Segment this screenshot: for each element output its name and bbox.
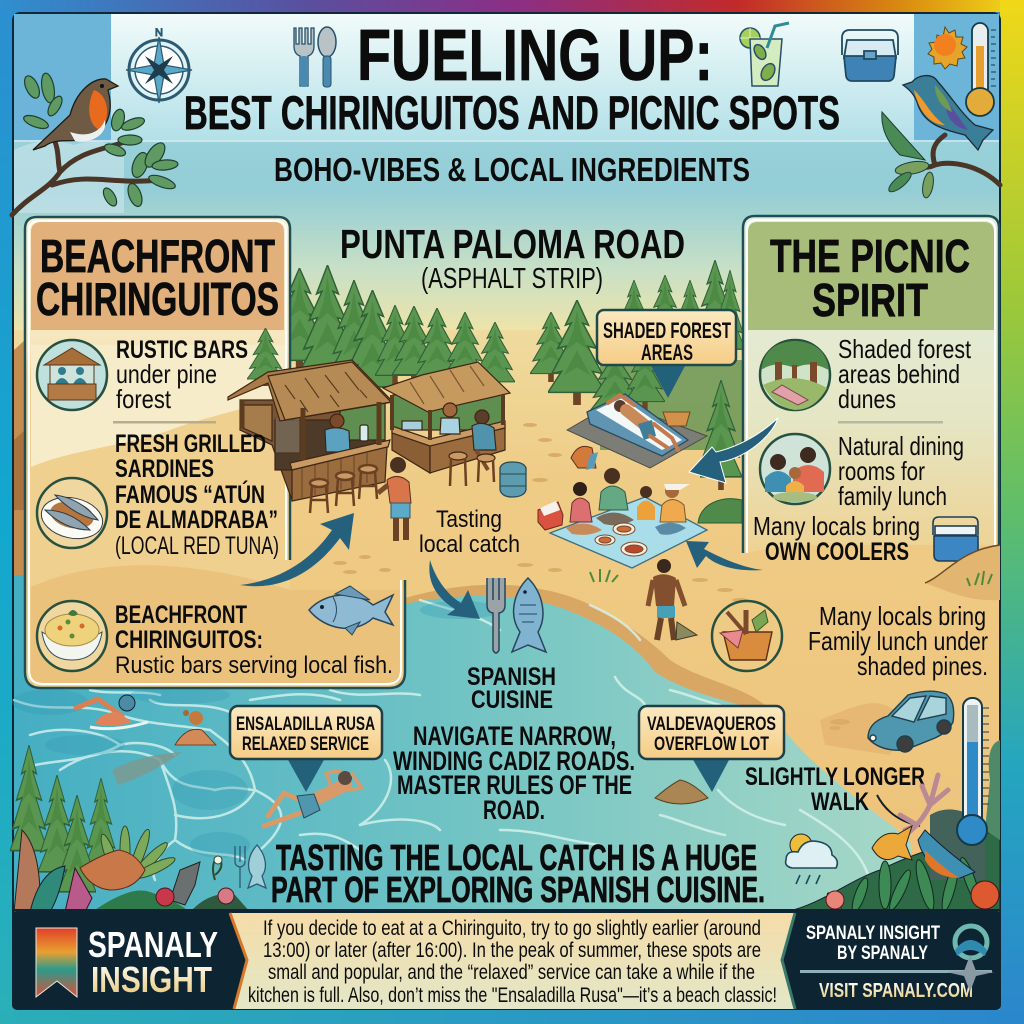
text: grilled sardines and tuna — [115, 430, 279, 560]
small pine in panel — [247, 328, 284, 386]
footprints in the sand — [333, 423, 850, 730]
text: shaded forest areas — [838, 334, 972, 414]
child — [637, 486, 655, 520]
subtitle: BOHO-VIBES & LOCAL INGREDIENTS — [274, 151, 750, 188]
icon: small fork and fish — [235, 845, 266, 888]
panel heading — [31, 222, 284, 330]
text: navigate roads: WINDING CADIZ ROADS. — [393, 746, 635, 776]
icon: lower thermometer — [957, 698, 989, 845]
callout: valdevaqueros overflow lot — [639, 706, 784, 792]
illustration: family picnic blanket — [538, 468, 707, 568]
text: slightly longer walk: WALK — [811, 788, 869, 816]
arrow: to spanish cuisine — [429, 560, 480, 619]
icon: rustic bar — [37, 340, 107, 410]
footer logo: spanaly insight: INSIGHT — [91, 959, 212, 1000]
text: beachfront chiringuitos note: Rustic bars serving local fish. — [115, 652, 393, 679]
icon: family lunch — [760, 434, 830, 504]
footer tip scroll — [230, 913, 795, 1009]
callout: shaded forest areas: AREAS — [641, 340, 693, 365]
credit logo — [946, 926, 994, 992]
text: tasting local catch: local catch — [419, 531, 520, 558]
text: navigate roads — [393, 721, 635, 825]
icon: sun — [928, 27, 967, 69]
text: beachfront chiringuitos note: CHIRINGUITOS: — [115, 626, 263, 654]
footer credit: VISIT SPANALY.COM — [819, 980, 973, 1002]
illustration: bar stools — [310, 465, 377, 513]
arrow: to picnic from beach — [686, 541, 763, 570]
footer tip scroll: 13:00) or later (after 16:00). In the peak of summer, these spots are — [263, 939, 761, 962]
text: own coolers: Many locals bring — [753, 511, 920, 541]
text: natural dining rooms: rooms for — [838, 456, 925, 486]
illustration: walking man — [648, 559, 697, 640]
closing statement — [271, 837, 765, 910]
callout: ensaladilla rusa: RELAXED SERVICE — [242, 734, 369, 755]
foliage: bottom right with fish and bird — [785, 740, 1000, 919]
road heading — [340, 221, 685, 295]
icon: fork and fish — [487, 578, 546, 653]
panel heading: SPIRIT — [812, 274, 928, 326]
icon: compass — [126, 27, 192, 103]
icon: picnic basket — [712, 601, 782, 671]
callout: ensaladilla rusa: ENSALADILLA RUSA — [236, 714, 375, 735]
illustration: swimmer two — [112, 710, 216, 785]
text: natural dining rooms — [838, 431, 964, 511]
text: family lunch note: shaded pines. — [857, 651, 988, 681]
icon: temperature gauge top — [966, 23, 996, 116]
text: grilled sardines and tuna: FAMOUS “ATÚN — [115, 479, 265, 509]
icon: blue cooler — [842, 30, 898, 81]
text: family lunch note: Family lunch under — [808, 626, 988, 656]
footer tip scroll: If you decide to eat at a Chiringuito, try to go slightly earlier (around — [263, 917, 761, 940]
footer logo: spanaly insight — [36, 924, 218, 1000]
closing statement: TASTING THE LOCAL CATCH IS A HUGE — [276, 837, 757, 878]
text: navigate roads: ROAD. — [483, 795, 545, 825]
illustration: blue car — [868, 691, 954, 752]
illustration: beach bar one — [228, 360, 393, 501]
footer tip scroll: small and popular, and the “relaxed” service can take a while if the — [268, 961, 755, 984]
text: beachfront chiringuitos note: BEACHFRONT — [115, 601, 247, 629]
title — [184, 16, 840, 139]
text: shaded forest areas: areas behind — [838, 359, 960, 389]
callout: shaded forest areas — [597, 310, 736, 398]
panel heading: BEACHFRONT — [40, 230, 275, 282]
text: own coolers: OWN COOLERS — [765, 538, 909, 566]
text: grilled sardines and tuna: FRESH GRILLED — [115, 430, 266, 458]
text: grilled sardines and tuna: SARDINES — [115, 455, 214, 483]
darker water patches — [12, 601, 500, 858]
man — [596, 468, 634, 525]
illustration: rock — [655, 780, 708, 804]
text: slightly longer walk — [745, 763, 925, 816]
footer bar — [12, 909, 1001, 1010]
illustration: barrel — [500, 462, 526, 497]
text: grilled sardines and tuna: DE ALMADRABA” — [115, 506, 278, 534]
icon: sun and rain cloud — [786, 834, 837, 884]
elder — [655, 484, 690, 535]
red cooler — [538, 501, 563, 530]
closing statement: PART OF EXPLORING SPANISH CUISINE. — [271, 869, 765, 910]
text: slightly longer walk: SLIGHTLY LONGER — [745, 763, 925, 791]
illustration: person on lounger — [567, 394, 707, 468]
footer logo: spanaly insight: SPANALY — [88, 924, 218, 965]
icon: mojito glass — [740, 23, 789, 86]
callout: shaded forest areas: SHADED FOREST — [603, 318, 731, 343]
text: navigate roads: NAVIGATE NARROW, — [413, 721, 616, 751]
text: family lunch note — [808, 601, 988, 681]
water ripples — [14, 600, 868, 880]
callout: valdevaqueros overflow lot: OVERFLOW LOT — [654, 734, 769, 755]
footer tip scroll: kitchen is full. Also, don’t miss the "Ensaladilla Rusa"—it’s a beach classic! — [248, 984, 777, 1007]
dune on right — [925, 545, 1000, 600]
footer credit: BY SPANALY — [837, 943, 928, 964]
icon: grilled sardines — [37, 478, 107, 548]
foliage: bottom left — [10, 745, 250, 912]
text: spanish cuisine: SPANISH — [467, 663, 556, 691]
footer credit — [800, 923, 994, 1002]
header band — [14, 14, 999, 142]
text: spanish cuisine — [467, 663, 556, 714]
text: rustic bars: under pine — [116, 359, 217, 389]
text: tasting local catch: Tasting — [436, 506, 502, 533]
forest: left pines — [272, 265, 515, 400]
text: family lunch note: Many locals bring — [819, 601, 986, 631]
text: natural dining rooms: family lunch — [838, 481, 947, 511]
icon: shaded forest — [760, 340, 830, 410]
text: own coolers — [753, 511, 920, 566]
text: rustic bars: forest — [116, 384, 172, 414]
footer credit: SPANALY INSIGHT — [806, 923, 940, 944]
panel heading: CHIRINGUITOS — [36, 273, 279, 325]
icon: blue fish — [309, 586, 393, 635]
icon: cooler — [933, 517, 978, 561]
panel heading: THE PICNIC — [770, 230, 970, 282]
icon: fork and spoon — [294, 27, 336, 87]
text: natural dining rooms: Natural dining — [838, 431, 964, 461]
plates — [595, 523, 647, 556]
callout: valdevaqueros overflow lot: VALDEVAQUEROS — [647, 714, 776, 735]
text: navigate roads: MASTER RULES OF THE — [397, 770, 632, 800]
title: FUELING UP: — [357, 16, 713, 96]
left panel: beachfront chiringuitos — [25, 217, 405, 688]
text: rustic bars — [116, 336, 248, 414]
callout: ensaladilla rusa — [230, 706, 382, 792]
road heading: (ASPHALT STRIP) — [421, 263, 603, 295]
illustration: grass tuft — [590, 569, 618, 582]
panel heading — [748, 222, 994, 330]
text: beachfront chiringuitos note — [115, 601, 393, 679]
illustration: beach bag — [571, 446, 598, 470]
right panel: the picnic spirit — [743, 216, 999, 566]
road heading: PUNTA PALOMA ROAD — [340, 221, 685, 267]
illustration: floating man — [264, 771, 362, 826]
text: rustic bars: RUSTIC BARS — [116, 336, 248, 364]
illustration: man at bar — [378, 457, 411, 541]
text: spanish cuisine: CUISINE — [471, 686, 553, 714]
icon: ensaladilla bowl — [37, 601, 107, 671]
illustration: swimmer one — [76, 695, 148, 729]
text: shaded forest areas: Shaded forest — [838, 334, 972, 364]
illustration: robin on branch — [12, 72, 178, 215]
text: shaded forest areas: dunes — [838, 384, 896, 414]
arrow: to beach bar — [240, 513, 354, 586]
woman — [566, 482, 602, 535]
icon: compass: N — [155, 27, 163, 39]
illustration: beach bar two — [383, 362, 510, 486]
arrow: to picnic from forest — [689, 418, 778, 483]
forest: right pines — [530, 260, 745, 523]
text: tasting local catch — [419, 506, 520, 558]
illustration: bluebird on pine branch — [882, 76, 1000, 199]
text: grilled sardines and tuna: (LOCAL RED TUNA) — [115, 532, 279, 560]
